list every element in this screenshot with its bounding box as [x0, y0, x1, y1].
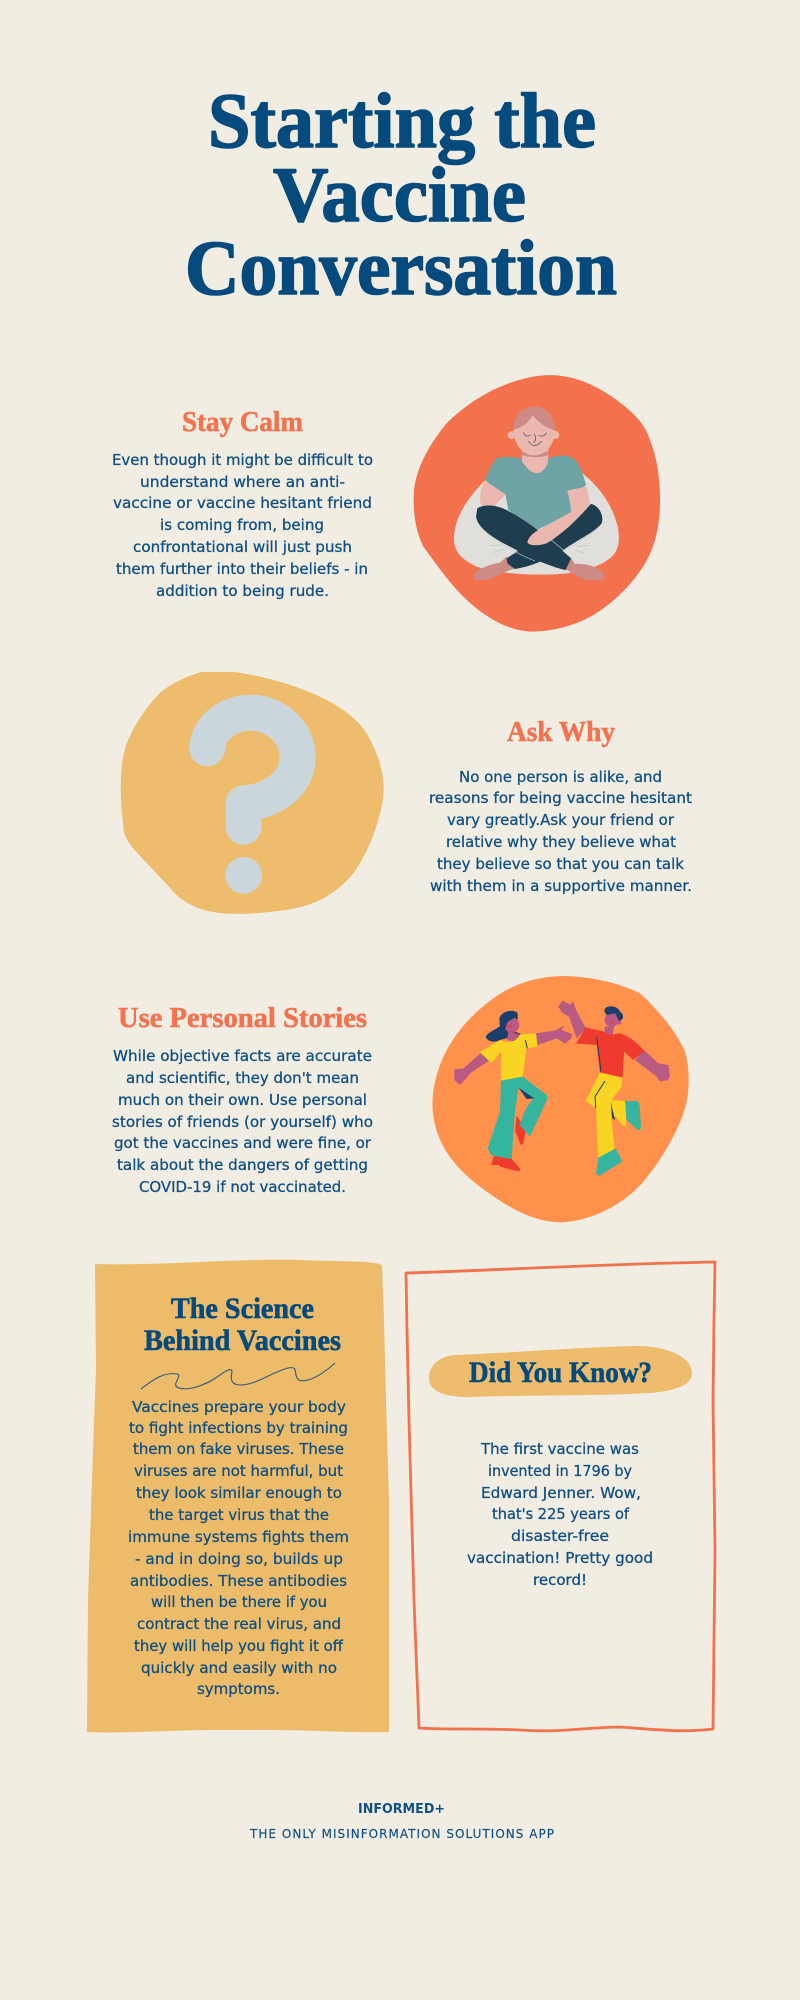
- panel: the science behind vaccines: [87, 1260, 389, 1732]
- text block: did you know: that's 225 years of: [492, 1505, 630, 1523]
- text block: did you know: record!: [533, 1571, 587, 1589]
- text block: science: they look similar enough to: [136, 1484, 342, 1502]
- text block: ask why: reasons for being vaccine hesitant: [429, 789, 692, 807]
- panel background: yellow torn paper: [87, 1260, 389, 1732]
- heading: science behind vaccines: The Science: [171, 1292, 314, 1325]
- heading: science behind vaccines: [144, 1292, 341, 1357]
- text block: did you know: [467, 1440, 653, 1589]
- text block: stay calm: [112, 451, 373, 600]
- text block: science: viruses are not harmful, but: [134, 1462, 343, 1480]
- text block: science: the target virus that the: [149, 1506, 329, 1524]
- squiggle underline: [141, 1363, 335, 1389]
- text block: personal stories: and scientific, they don't mean: [126, 1069, 359, 1087]
- text block: science: antibodies. These antibodies: [130, 1572, 347, 1590]
- title: Starting the: [208, 77, 596, 164]
- text block: stay calm: them further into their beliefs - in: [116, 560, 368, 578]
- footer: brand name: INFORMED+: [358, 1801, 445, 1817]
- text block: personal stories: COVID-19 if not vaccinated.: [139, 1178, 346, 1196]
- text block: ask why: vary greatly.Ask your friend or: [447, 811, 675, 829]
- text block: stay calm: vaccine or vaccine hesitant friend: [113, 494, 372, 512]
- text block: science: will then be there if you: [151, 1593, 327, 1611]
- text block: personal stories: got the vaccines and were fine, or: [114, 1134, 372, 1152]
- footer: tagline: THE ONLY MISINFORMATION SOLUTIONS APP: [249, 1827, 554, 1841]
- text block: ask why: relative why they believe what: [446, 833, 676, 851]
- text block: did you know: vaccination! Pretty good: [467, 1549, 653, 1567]
- text block: science: symptoms.: [197, 1680, 280, 1698]
- text block: science: [128, 1398, 349, 1698]
- icon: question mark on yellow blob: [121, 672, 384, 914]
- hand-drawn red frame: [406, 1262, 715, 1731]
- text block: did you know: invented in 1796 by: [488, 1462, 632, 1480]
- text block: did you know: disaster-free: [511, 1527, 609, 1545]
- heading: ask why: Ask Why: [507, 717, 615, 748]
- text block: ask why: No one person is alike, and: [459, 768, 662, 786]
- text block: did you know: The first vaccine was: [480, 1440, 639, 1458]
- text block: did you know: Edward Jenner. Wow,: [481, 1484, 641, 1502]
- text block: stay calm: understand where an anti-: [140, 473, 345, 491]
- heading: use personal stories: Use Personal Stories: [118, 1003, 367, 1034]
- title: Conversation: [185, 224, 617, 311]
- footer: [249, 1801, 554, 1841]
- title: [185, 77, 617, 311]
- text block: science: to fight infections by training: [129, 1419, 348, 1437]
- text block: science: Vaccines prepare your body: [132, 1398, 346, 1416]
- text block: science: immune systems fights them: [128, 1528, 349, 1546]
- text block: stay calm: addition to being rude.: [156, 582, 329, 600]
- text block: stay calm: is coming from, being: [160, 516, 324, 534]
- panel: ask why text: [429, 717, 692, 895]
- text block: personal stories: much on their own. Use personal: [118, 1091, 367, 1109]
- panel: personal stories text: [112, 1003, 373, 1196]
- heading: science behind vaccines: Behind Vaccines: [144, 1324, 341, 1357]
- icon: dancing couple on orange blob: [432, 976, 689, 1222]
- panel: stay calm text: [112, 407, 373, 600]
- title: Vaccine: [273, 151, 526, 238]
- text block: science: - and in doing so, builds up: [135, 1550, 343, 1568]
- text block: personal stories: While objective facts are accurate: [113, 1047, 372, 1065]
- text block: stay calm: confrontational will just push: [133, 538, 352, 556]
- heading: stay calm: Stay Calm: [182, 407, 303, 438]
- icon: meditating person on red blob: [414, 375, 660, 632]
- text block: personal stories: talk about the dangers of getting: [117, 1156, 368, 1174]
- heading: did you know: Did You Know?: [469, 1356, 652, 1389]
- text block: science: contract the real virus, and: [137, 1615, 341, 1633]
- text block: personal stories: stories of friends (or yourself) who: [112, 1113, 373, 1131]
- text block: ask why: [429, 768, 692, 895]
- yellow brush pill: [429, 1346, 692, 1397]
- text block: stay calm: Even though it might be difficult to: [112, 451, 373, 469]
- text block: science: they will help you fight it off: [134, 1637, 344, 1655]
- panel: did you know: [406, 1262, 715, 1731]
- text block: science: them on fake viruses. These: [133, 1440, 344, 1458]
- text block: personal stories: [112, 1047, 373, 1196]
- text block: science: quickly and easily with no: [141, 1659, 337, 1677]
- text block: ask why: they believe so that you can talk: [437, 855, 684, 873]
- text block: ask why: with them in a supportive manner.: [430, 877, 692, 895]
